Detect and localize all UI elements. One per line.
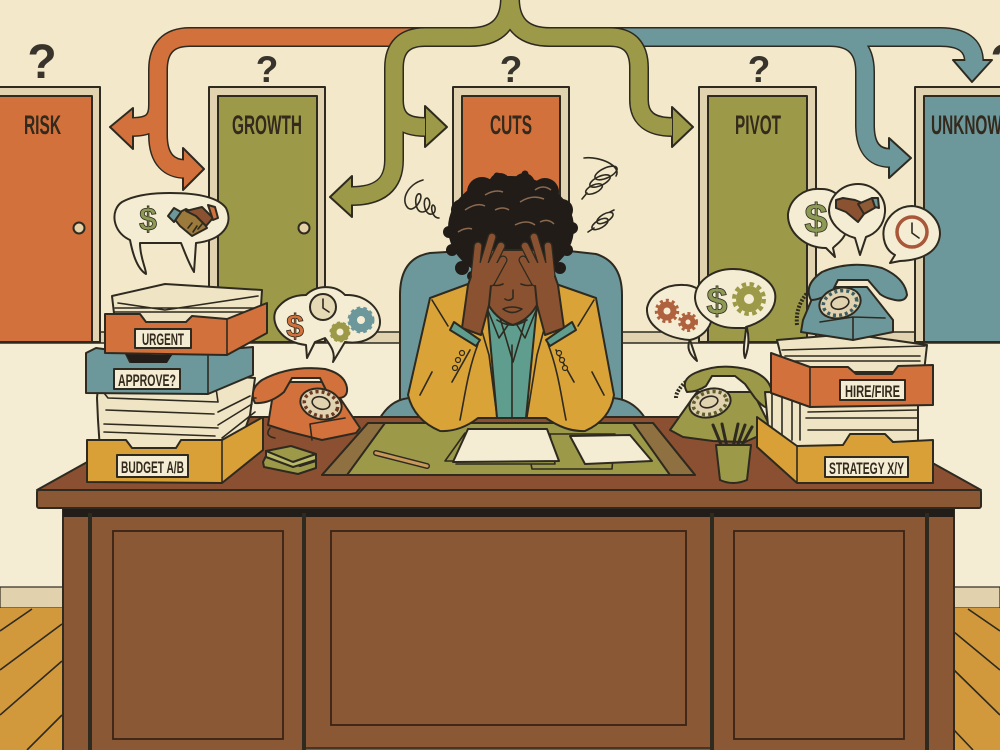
woman: jacket and torso [408, 284, 614, 431]
pencil cup [713, 424, 752, 483]
door: unknown [915, 87, 1000, 342]
icon: clock [897, 217, 927, 247]
tray: urgent with papers: URGENT [142, 330, 184, 349]
arrows: orange branch to risk and growth [110, 37, 450, 190]
blue telephone on right stack [797, 265, 907, 340]
door: growth: GROWTH [232, 110, 302, 140]
jacket buttons [452, 350, 568, 370]
door: cuts [453, 87, 569, 342]
door: risk: RISK [24, 110, 61, 140]
icons: gears [331, 308, 373, 341]
door: cuts: CUTS [490, 110, 532, 140]
question marks [27, 36, 1000, 90]
office chair [380, 250, 645, 420]
small stacked notebooks [263, 446, 316, 474]
bubbles: dollar, handshake, clock [788, 184, 940, 263]
woman: left hand on head [462, 237, 503, 335]
icon: gear [734, 284, 764, 314]
question marks: ? [256, 49, 278, 90]
tray: strategy X/Y with folders: STRATEGY X/Y [829, 459, 904, 478]
tray: hire/fire with papers: HIRE/FIRE [845, 382, 900, 401]
tray: approve?: APPROVE? [118, 371, 176, 390]
tray: budget A/B with papers [87, 376, 263, 483]
wood floor [0, 608, 1000, 750]
tray: urgent with papers [105, 284, 267, 355]
icon: handshake [168, 205, 218, 236]
bubbles: gears and dollar [647, 269, 775, 361]
question marks: ? [748, 49, 770, 90]
icon: clock [310, 294, 336, 320]
bubble: dollar and handshake: $ [139, 201, 157, 237]
bubble: dollar, clock and gears: $ [286, 308, 304, 344]
desk body with drawers [37, 490, 981, 750]
door: risk [0, 87, 100, 342]
bubbles: gears and dollar: $ [706, 281, 728, 323]
wall background [0, 332, 1000, 608]
stress swirls [405, 158, 619, 232]
red telephone [248, 368, 360, 440]
door: pivot [699, 87, 816, 342]
desk top surface [37, 417, 981, 490]
tray: hire/fire with papers [771, 334, 933, 407]
bubble: dollar, clock and gears [274, 287, 380, 362]
question marks: ? [500, 49, 522, 90]
bubble: dollar and handshake [114, 193, 228, 274]
question marks: ? [27, 36, 57, 89]
tray: strategy X/Y with folders [757, 392, 933, 483]
woman: right hand on head [523, 237, 564, 335]
tray: approve? [86, 347, 253, 394]
door: pivot: PIVOT [735, 110, 781, 140]
arrows: blue branch to unknown [590, 37, 992, 178]
desk blotter mat with papers and pen [322, 423, 695, 475]
tray: budget A/B with papers: BUDGET A/B [121, 458, 184, 477]
shirt collar [487, 302, 537, 338]
green telephone [670, 367, 772, 442]
woman: shirt cuffs [450, 322, 576, 346]
jacket lapels and sleeve seams [420, 300, 604, 420]
bubbles: dollar, handshake, clock: $ [804, 195, 828, 242]
arrows: olive trunk to cuts, growth and pivot [330, 0, 693, 217]
icon: handshake [836, 198, 879, 222]
door: growth [209, 87, 325, 342]
woman: face [484, 250, 541, 325]
woman: curly hair [443, 170, 578, 281]
